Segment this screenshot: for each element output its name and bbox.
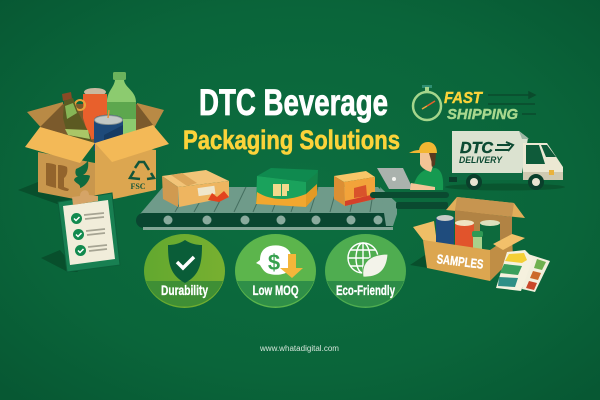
- icon: brown bottle: [62, 92, 92, 142]
- sample cans: [436, 215, 500, 252]
- illustration: delivery truck: [445, 131, 565, 190]
- illustration: open beverage box: [18, 72, 169, 210]
- badge: eco-friendly: Eco-Friendly: [336, 283, 395, 298]
- footer url: www.whatadigital.com: [259, 344, 339, 353]
- checklist row 1: [71, 213, 104, 224]
- illustration: conveyor belt: [136, 187, 397, 230]
- icon: shield with check: [168, 240, 202, 283]
- badge: low MOQ: Low MOQ: [252, 283, 298, 298]
- icon: globe with leaf: [348, 243, 388, 277]
- parcel: cardboard box on belt: [162, 170, 229, 207]
- fast shipping label: [444, 90, 518, 123]
- checklist row 3: [75, 245, 107, 256]
- truck label: DELIVERY: [459, 155, 503, 165]
- truck label: [459, 140, 513, 165]
- title: [183, 82, 400, 155]
- icon: leaf mark: [74, 161, 90, 188]
- illustration: samples box: [410, 197, 525, 281]
- icon: blue can: [94, 110, 123, 151]
- conveyor rollers: [164, 216, 382, 224]
- illustration: worker at laptop: [377, 142, 443, 190]
- icon: green bottle: [107, 72, 136, 137]
- icon: FSC recycling mark: [130, 162, 154, 191]
- color swatch cards: [496, 250, 550, 292]
- icon: FSC recycling mark: FSC: [130, 182, 146, 191]
- badge: low MOQ: [235, 234, 316, 308]
- icon: glass and umbrella handling marks: [46, 163, 69, 191]
- desk: [370, 192, 449, 209]
- badge: durability: Durability: [161, 283, 208, 298]
- fast shipping label: SHIPPING: [447, 106, 518, 123]
- illustration: checklist clipboard: [41, 190, 120, 272]
- speed lines arrow: [488, 92, 536, 114]
- parcel: orange box: [334, 171, 375, 206]
- truck label: DTC: [460, 140, 493, 157]
- stopwatch icon: [413, 85, 441, 120]
- truck wheels: [466, 174, 544, 190]
- title: DTC Beverage: [199, 82, 388, 123]
- samples label: SAMPLES: [436, 251, 485, 272]
- fast shipping label: FAST: [444, 90, 483, 107]
- badge: durability: [144, 234, 225, 308]
- checklist row 2: [73, 229, 105, 240]
- title: Packaging Solutions: [183, 125, 400, 155]
- badge: eco-friendly: [325, 234, 406, 308]
- parcel: green branded box: [256, 168, 318, 207]
- icon: dollar with down arrow: $: [268, 250, 280, 275]
- icon: orange can: [75, 88, 107, 140]
